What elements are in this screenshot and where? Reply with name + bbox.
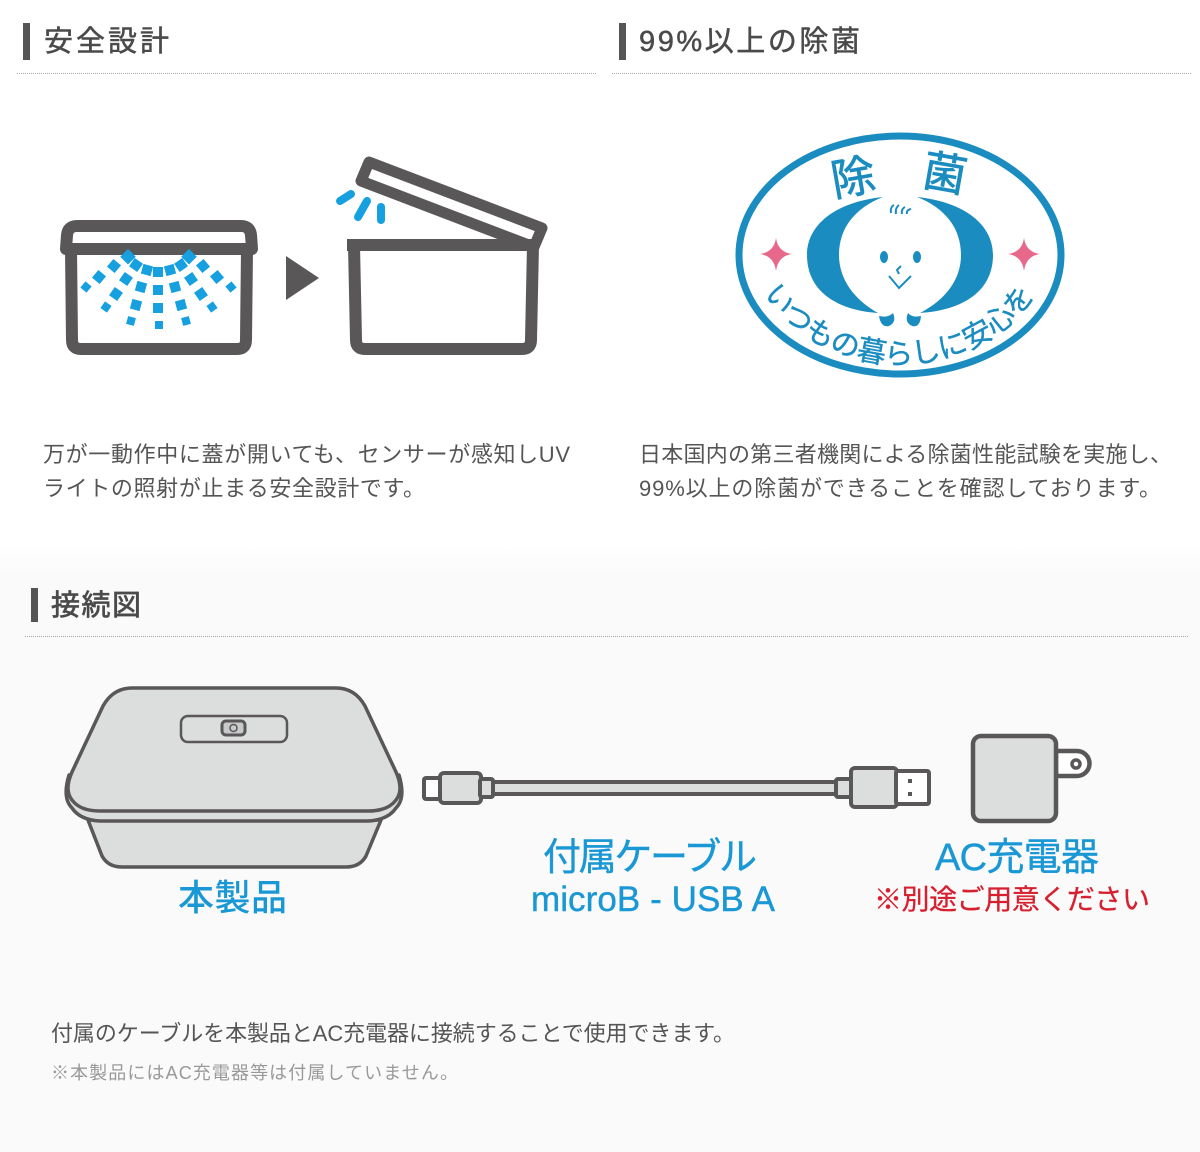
text: sterilization description: 日本国内の第三者機関による除菌性能試験を実施し、 bbox=[639, 442, 1172, 467]
text: sterilization description bbox=[639, 442, 1172, 501]
illustration: product bbox=[66, 688, 402, 867]
heading: connection diagram: 接続図 bbox=[51, 589, 141, 622]
illustration: AC charger bbox=[973, 736, 1090, 821]
arrow bbox=[286, 256, 319, 300]
label: cable: 付属ケーブル bbox=[543, 837, 757, 879]
text: connection description: 付属のケーブルを本製品とAC充電器に接続することで使用できます。 bbox=[51, 1021, 735, 1046]
badge: sterilization mark: 除 bbox=[828, 151, 879, 206]
label: cable: microB - USB A bbox=[531, 880, 776, 919]
text: safety description: 万が一動作中に蓋が開いても、センサーが感知しUV bbox=[43, 442, 570, 467]
heading: sterilization bbox=[612, 23, 1192, 74]
badge: sterilization mark bbox=[736, 132, 1064, 378]
badge: sterilization mark: いつもの暮らしに安心を bbox=[768, 284, 1033, 366]
panel: safety design bbox=[17, 23, 597, 501]
text: safety description: ライトの照射が止まる安全設計です。 bbox=[43, 476, 425, 501]
badge: sterilization mark: 菌 bbox=[919, 147, 970, 202]
panel: 99% sterilization bbox=[612, 23, 1191, 501]
heading: safety design bbox=[17, 23, 597, 74]
text: safety description bbox=[43, 442, 570, 501]
label: cable bbox=[531, 837, 776, 919]
label: AC charger: AC充電器 bbox=[935, 837, 1099, 879]
text: sterilization description: 99%以上の除菌ができることを確認しております。 bbox=[639, 476, 1161, 501]
illustration: USB cable bbox=[424, 768, 929, 807]
panel: connection diagram bbox=[25, 588, 1188, 1083]
note: sold separately: ※別途ご用意ください bbox=[874, 884, 1150, 915]
icon: closed box emitting UV light bbox=[66, 226, 252, 349]
icon: opened box with UV light stopped bbox=[340, 162, 542, 349]
label: product: 本製品 bbox=[178, 877, 287, 918]
heading: connection diagram bbox=[25, 588, 1188, 636]
note: charger not included: ※本製品にはAC充電器等は付属していません。 bbox=[51, 1063, 458, 1083]
heading: sterilization: 99%以上の除菌 bbox=[639, 25, 860, 58]
heading: safety design: 安全設計 bbox=[44, 25, 169, 58]
